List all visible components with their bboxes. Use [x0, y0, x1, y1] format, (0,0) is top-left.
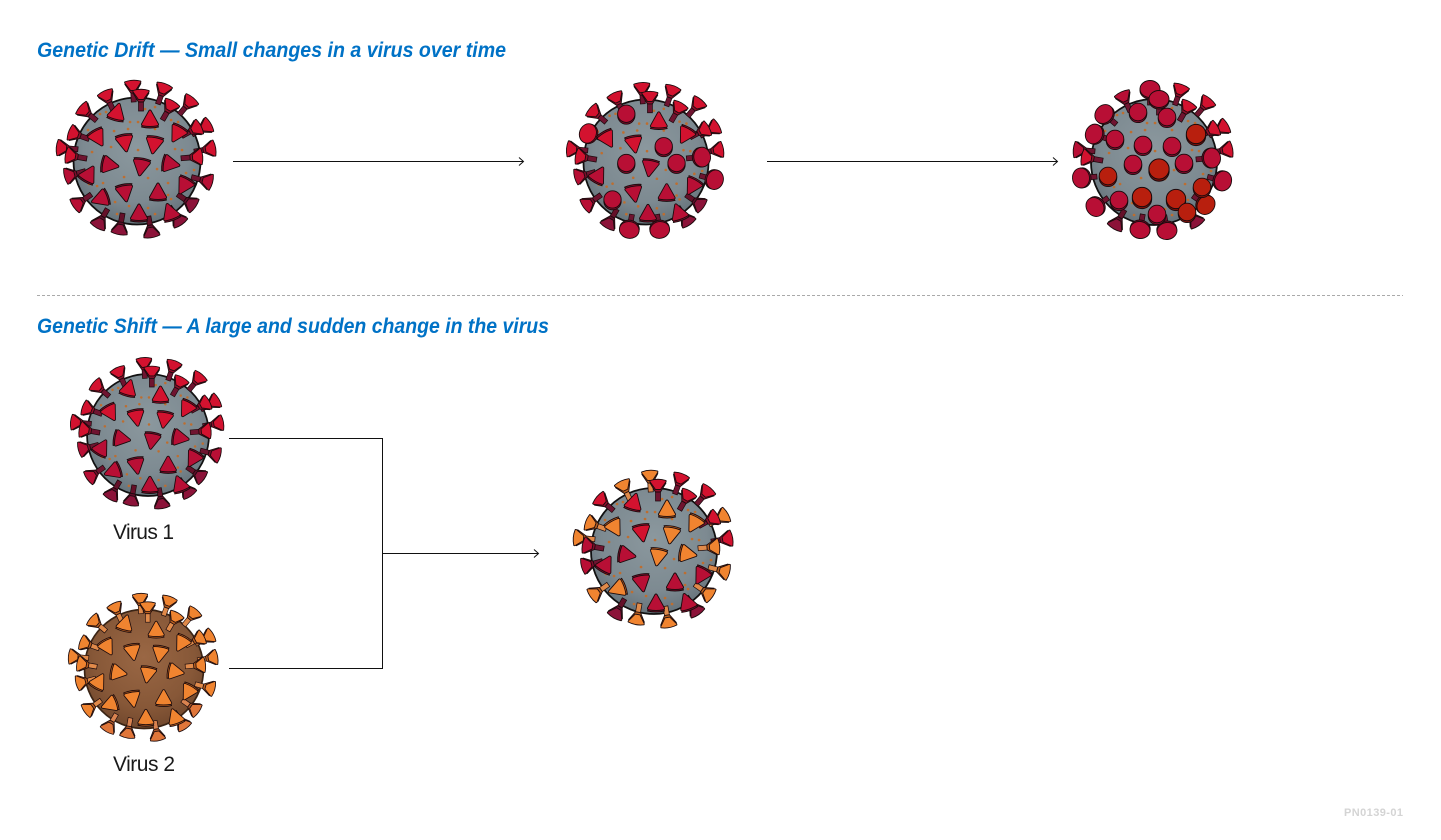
- sphere: [583, 99, 709, 225]
- rim spikes: [68, 593, 219, 742]
- rim spikes: [573, 470, 734, 629]
- virus: drift stage 3: [1072, 80, 1234, 241]
- virus 2: [68, 593, 219, 742]
- rim spikes: [1072, 80, 1234, 241]
- virus: reassorted result: [573, 470, 734, 629]
- title: genetic drift: Genetic Drift — Small changes in a virus over time: [37, 39, 506, 62]
- sphere: [85, 610, 203, 728]
- surface spikes: [1099, 103, 1211, 225]
- surface spikes: [90, 377, 205, 495]
- surface dots: [598, 109, 702, 214]
- surface spikes: [88, 613, 199, 727]
- rim spikes: [566, 82, 726, 240]
- surface spikes: [594, 491, 713, 613]
- surface spikes: [587, 105, 704, 223]
- figure code: PN0139-01: [1344, 807, 1403, 819]
- virus: drift stage 1: [56, 80, 217, 239]
- arrow: stage 2 to stage 3: [767, 158, 1058, 166]
- arrow: stage 1 to stage 2: [233, 158, 524, 166]
- surface dots: [101, 383, 203, 486]
- sphere: [87, 374, 209, 496]
- divider: [37, 294, 1403, 296]
- surface dots: [605, 497, 711, 604]
- label: virus 1: Virus 1: [113, 521, 174, 544]
- rim spikes: [70, 357, 225, 510]
- surface dots: [88, 107, 194, 214]
- sphere: [1091, 99, 1217, 225]
- surface spikes: [77, 101, 196, 223]
- sphere: [591, 488, 717, 614]
- virus 1: [70, 357, 225, 510]
- title: genetic shift: Genetic Shift — A large and sudden change in the virus: [37, 315, 549, 338]
- sphere: [74, 98, 200, 224]
- surface dots: [1105, 108, 1211, 215]
- label: virus 2: Virus 2: [113, 753, 175, 776]
- virus: drift stage 2: [566, 82, 726, 240]
- rim spikes: [56, 80, 217, 239]
- connector: viruses combine into new virus: [229, 438, 538, 668]
